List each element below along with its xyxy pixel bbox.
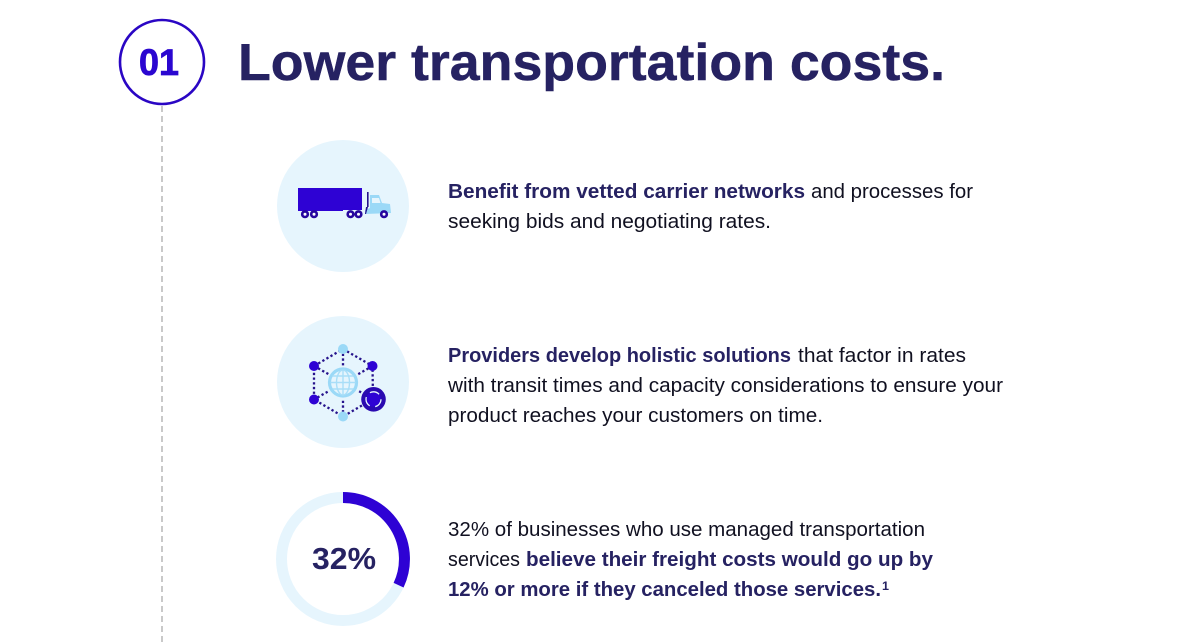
text: carrier networks: seeking bids and negotiating rates. [448, 211, 771, 233]
text: carrier networks: and processes for [811, 181, 973, 203]
text: carrier networks [448, 181, 973, 233]
text: 32 percent statistic: believe their freight costs would go up by [526, 549, 934, 571]
panel: carrier networks [277, 140, 973, 272]
panel: holistic solutions [277, 316, 1003, 448]
text: 32 percent statistic: services [448, 549, 520, 571]
icon: truck [277, 140, 409, 272]
text: 32 percent statistic: 1 [882, 579, 889, 593]
text: holistic solutions: product reaches your customers on time. [448, 405, 823, 427]
text: carrier networks: Benefit from vetted carrier networks [448, 181, 805, 203]
donut chart: 32% [282, 498, 404, 620]
text: 32 percent statistic [448, 519, 934, 601]
text: 32 percent statistic: 12% or more if they canceled those services. [448, 579, 881, 601]
step number badge [120, 20, 204, 104]
text: holistic solutions [447, 345, 1003, 427]
icon: network globe [277, 316, 409, 448]
text: holistic solutions: Providers develop holistic solutions [448, 345, 791, 367]
step number badge: 01 [139, 42, 179, 83]
panel: 32 percent statistic [282, 498, 934, 620]
donut chart: 32%: 32% [312, 541, 376, 576]
text: 32 percent statistic: 32% of businesses who use managed transportation [448, 519, 925, 541]
title: Lower transportation costs. [238, 34, 945, 92]
text: holistic solutions: with transit times and capacity considerations to ensure your [447, 375, 1003, 397]
text: holistic solutions: that factor in rates [798, 345, 966, 367]
